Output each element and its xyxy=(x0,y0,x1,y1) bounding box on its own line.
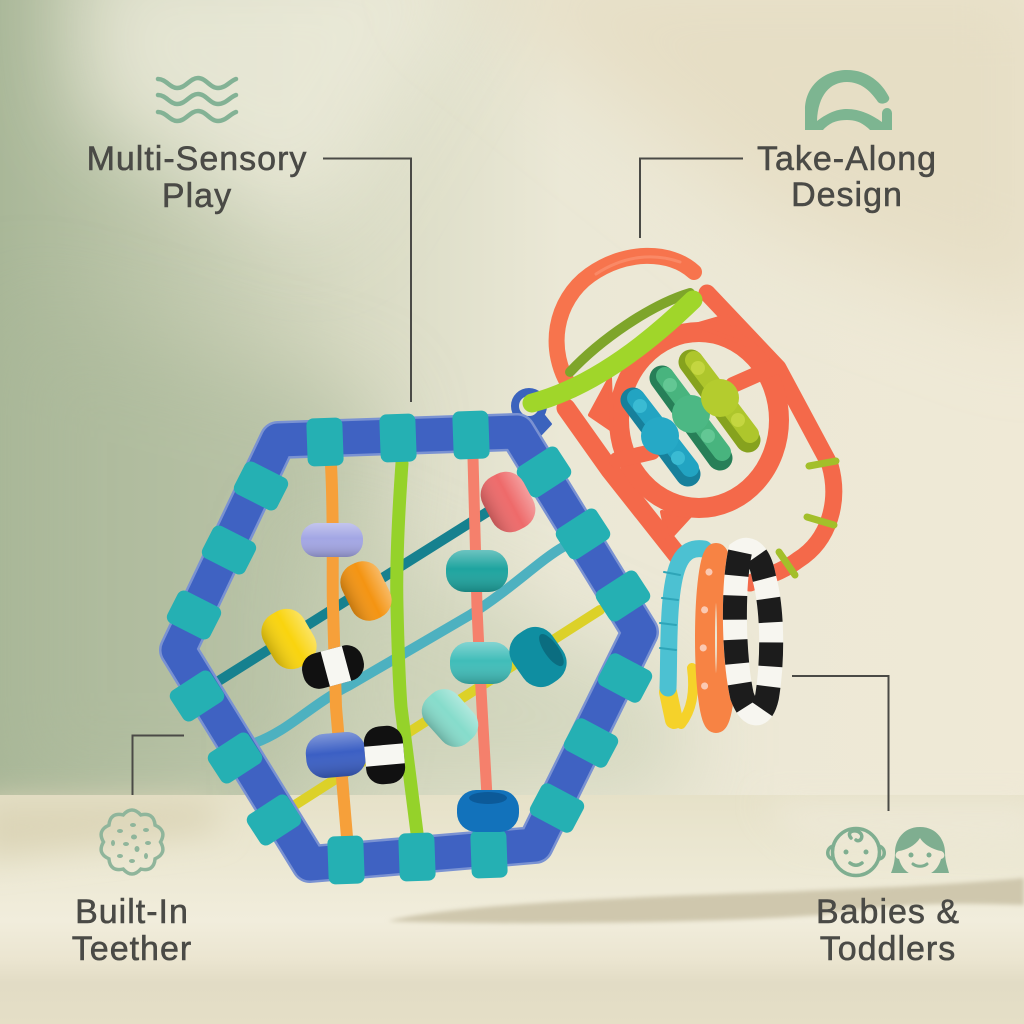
toy: coral rattle link xyxy=(515,256,836,583)
heading: Take-Along Design xyxy=(757,140,937,214)
floor shadow of toy xyxy=(388,878,1024,923)
orange ring xyxy=(557,256,694,390)
teal blocks xyxy=(164,410,655,885)
heading: Built-In Teether xyxy=(72,893,192,968)
bead: blue star xyxy=(633,398,690,474)
arm-to-ring joins xyxy=(590,378,612,430)
bead: lime star xyxy=(691,360,750,440)
heading: Multi-Sensory Play: Multi-Sensory xyxy=(87,140,307,178)
cyan and yellow ring xyxy=(660,549,704,724)
icon: teether xyxy=(101,810,163,874)
icon: toddler face xyxy=(891,827,949,876)
toy: hanging rings xyxy=(660,549,771,724)
heading: Built-In Teether: Built-In xyxy=(75,893,189,931)
heading: Multi-Sensory Play: Play xyxy=(162,177,232,215)
beads xyxy=(254,465,575,832)
heading: Built-In Teether: Teether xyxy=(72,930,192,968)
leader line: multi-sensory xyxy=(323,158,411,402)
heading: Take-Along Design: Design xyxy=(791,176,903,214)
lime link xyxy=(532,293,693,403)
icon: take-along arch xyxy=(805,70,892,130)
coral body xyxy=(566,293,834,583)
leader line: take-along xyxy=(640,158,743,238)
heading: Babies and Toddlers: Toddlers xyxy=(820,930,956,968)
rods xyxy=(217,458,600,837)
leader line: babies and toddlers xyxy=(792,676,888,811)
blue hook xyxy=(515,392,551,444)
heading: Babies and Toddlers xyxy=(816,893,960,968)
small lime bands xyxy=(779,461,836,575)
frame xyxy=(178,432,640,864)
heading: Multi-Sensory Play xyxy=(87,140,307,215)
icon: baby face xyxy=(828,828,884,876)
bead: green star xyxy=(662,376,722,458)
leader line: teether xyxy=(132,736,184,795)
orange dotted ring xyxy=(703,553,727,723)
toy: blue hexagon frame with rods and beads xyxy=(164,410,655,885)
black and white ring xyxy=(735,550,771,713)
heading: Babies and Toddlers: Babies & xyxy=(816,893,960,931)
heading: Take-Along Design: Take-Along xyxy=(757,140,937,178)
icon: sensory waves xyxy=(158,78,236,121)
